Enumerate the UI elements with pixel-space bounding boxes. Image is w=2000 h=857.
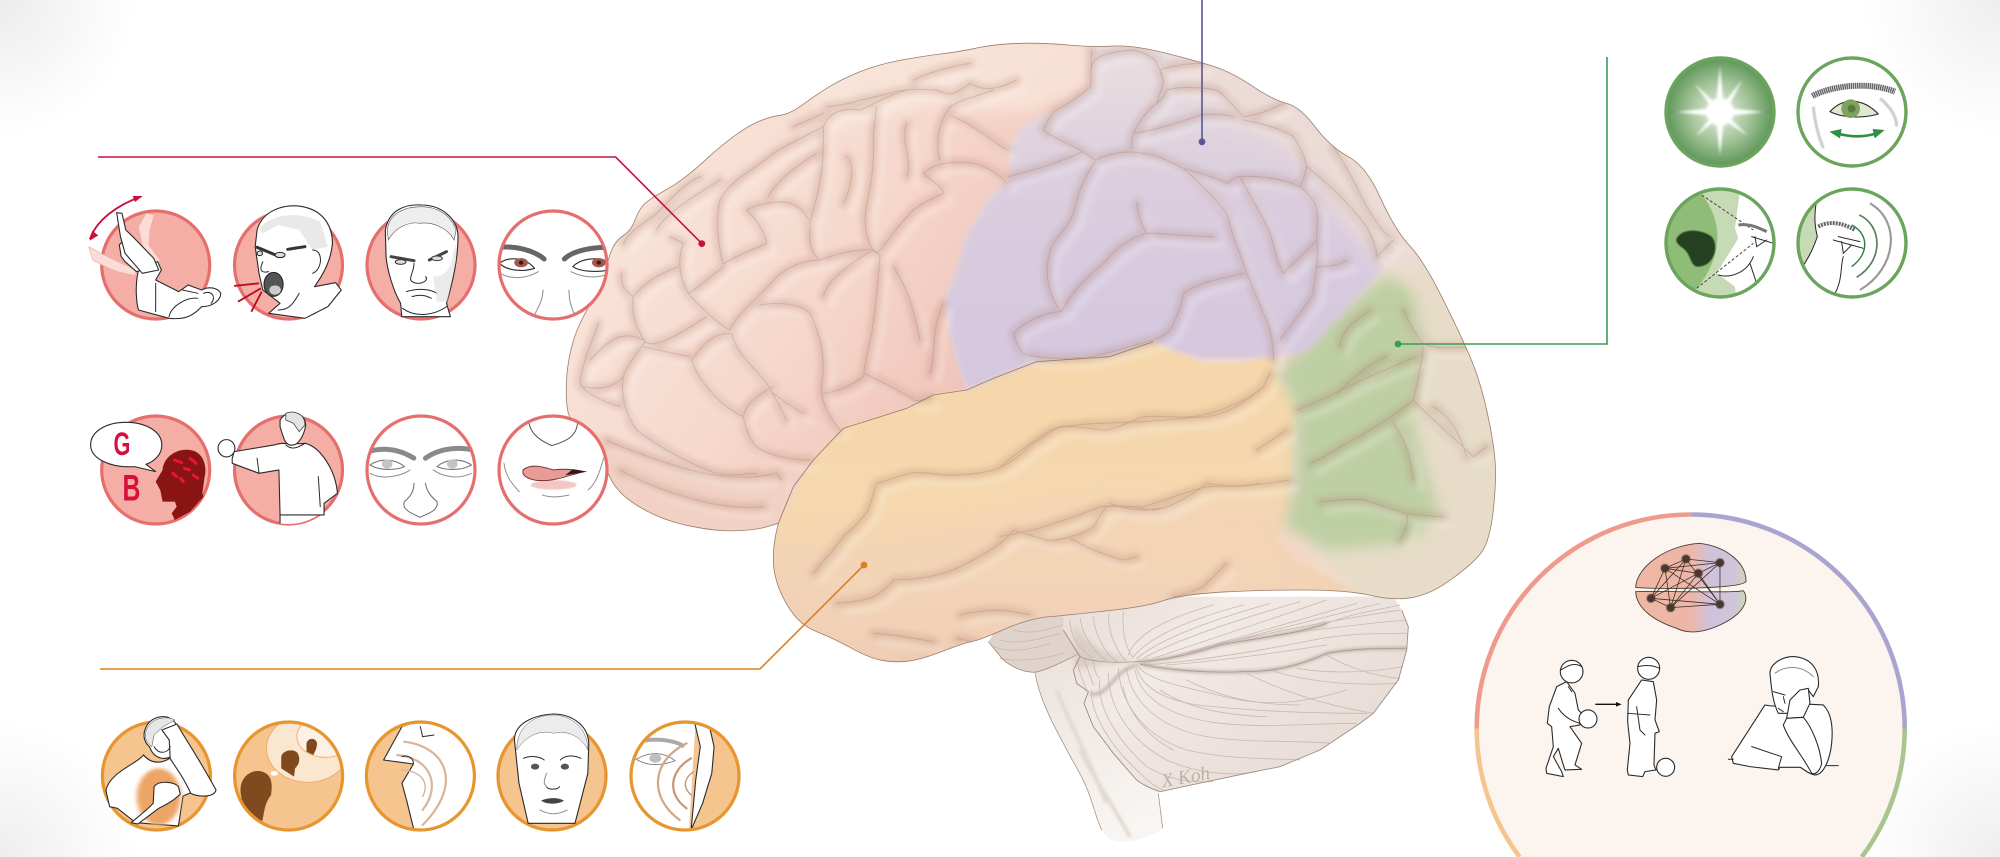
cerebellum main lobe: [1063, 597, 1408, 792]
icon: shouting man: [234, 206, 342, 319]
icon: flashing light: [1666, 58, 1774, 166]
icon: coloured letters speech bubble: G: [114, 426, 130, 462]
brain outline: [566, 43, 1496, 662]
icon: kicking baby: [89, 196, 221, 319]
cerebrum with coloured lobes: [560, 40, 1560, 673]
brain top view with network nodes: [1636, 543, 1746, 632]
parietal lobe: [945, 40, 1400, 390]
icon: eye with radiating waves: [1793, 189, 1906, 297]
icon: deja vu thought silhouettes: [235, 714, 354, 830]
icon: eye with moving gaze arrows: [1798, 58, 1906, 166]
icon: forward eyes and nose: [367, 416, 475, 524]
icon: man with raised fist: [218, 412, 342, 530]
leader line: parietal (purple): [1199, 0, 1205, 145]
ring: frontal segment: [1477, 514, 1691, 728]
artist signature: X Koh: [1159, 763, 1212, 792]
ring: temporal segment: [1477, 728, 1520, 857]
icon: frowning man: [367, 205, 475, 319]
occipital base: [1320, 268, 1495, 598]
cerebellum front lobe: [988, 603, 1080, 672]
leader line: frontal (red): [98, 157, 705, 247]
leader line: temporal (orange): [100, 562, 867, 669]
hindbrain: brainstem and cerebellum: [988, 597, 1408, 842]
icon: coloured letters speech bubble: B: [122, 466, 140, 509]
frontal upper tint: [898, 44, 1089, 113]
icon: frightened man: [498, 714, 606, 830]
orbital frontal: [596, 435, 690, 518]
icon: visual field scotoma: [1660, 189, 1774, 303]
child staring blankly: [1728, 657, 1838, 775]
child with dropped ball: [1627, 657, 1675, 777]
icon: staring eyes: [499, 211, 609, 319]
panel: network dysfunction circle: [1477, 514, 1905, 857]
brain illustration: [560, 40, 1560, 842]
sulcal shadow: [580, 50, 1487, 642]
icon: smell waves at the nose: [366, 720, 482, 832]
occipital green core: [1277, 273, 1440, 550]
icon: sound waves at the ear: [631, 720, 744, 833]
frontal lobe: [566, 98, 1066, 467]
brainstem: [1030, 623, 1163, 842]
lateral fissure: [778, 342, 1153, 523]
ring: occipital segment: [1862, 728, 1905, 857]
sulcal lines: [580, 50, 1487, 642]
child holding a ball: [1546, 660, 1597, 777]
icon: lip smacking mouth: [499, 416, 607, 524]
leader line: occipital (green): [1395, 57, 1607, 347]
icon: coloured letters speech bubble: [91, 416, 210, 524]
gyral highlights: [588, 59, 1495, 650]
parietal upper margin tint: [1196, 68, 1419, 274]
arrow: [1595, 703, 1618, 705]
temporal lower tint: [760, 496, 1327, 673]
ring: parietal segment: [1691, 514, 1905, 728]
icon: man with headache and chest pain: [102, 717, 216, 830]
temporal lobe: [774, 342, 1356, 662]
